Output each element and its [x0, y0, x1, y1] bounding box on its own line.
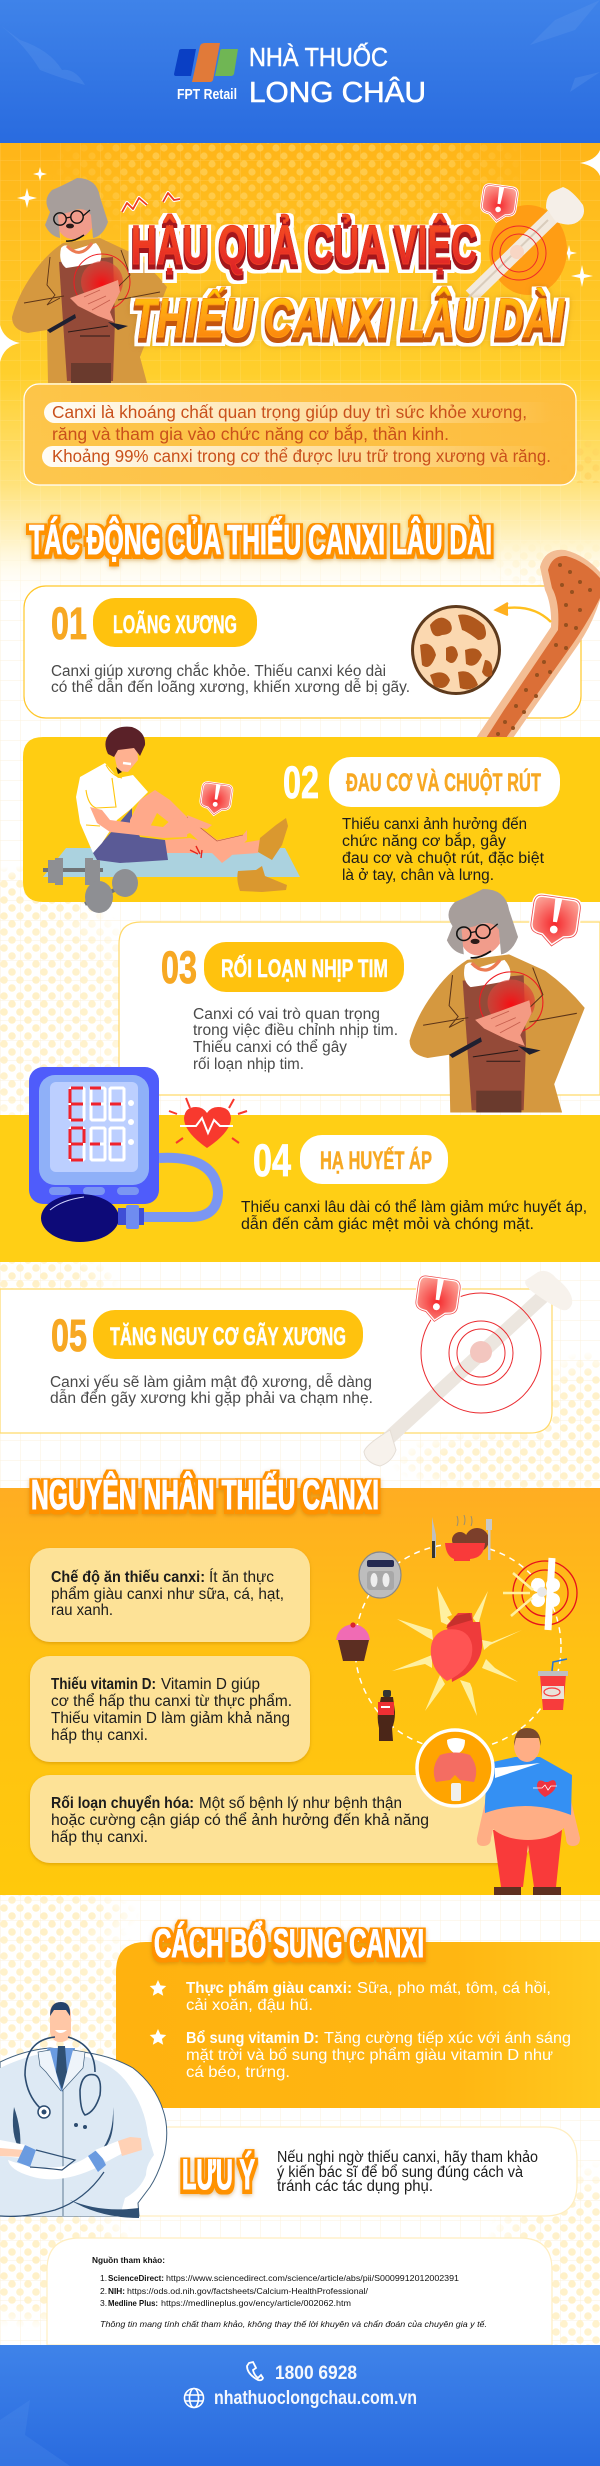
panel: references: https://ods.od.nih.gov/factsheets/Calcium-HealthProfessional/ [127, 2286, 369, 2296]
number 04: 04 [253, 1135, 291, 1186]
icon: cupcake [336, 1622, 370, 1661]
cause: diet: Chế độ ăn thiếu canxi: [51, 1569, 205, 1586]
body text: Thiếu canxi ảnh hưởng đến [342, 816, 527, 833]
body text: Thiếu canxi lâu dài có thể làm giảm mức huyết áp, [241, 1199, 587, 1216]
head [113, 745, 138, 772]
icon: joint pain [503, 1558, 577, 1630]
panel: references: https://www.sciencedirect.com/science/article/abs/pii/S0009912012002391 [166, 2273, 459, 2283]
label: Lưu ý: LƯU Ý [182, 2151, 255, 2199]
logo: FPT Retail [174, 43, 238, 103]
icon: thyroid [417, 1730, 493, 1806]
illustration: doctor [0, 2002, 167, 2218]
icon: heart with pulse [169, 1098, 247, 1148]
panel: references: Thông tin mang tính chất tham khảo, không thay thế lời khuyên và chẩn đoán của chuyên gia y tế. [100, 2319, 487, 2329]
badge: Loãng xương [93, 598, 257, 647]
cause: metabolic: Một số bệnh lý như bệnh thận [199, 1795, 402, 1812]
illustration: obese man [477, 1728, 580, 1895]
crossed arms [8, 2153, 100, 2179]
cause: vitamin D: hấp thụ canxi. [51, 1727, 148, 1744]
brand name [249, 42, 426, 109]
panel: note [120, 2127, 577, 2216]
panel: how to supplement [116, 1942, 600, 2108]
icon: cola bottle [378, 1690, 395, 1741]
panel: references: 3. [100, 2298, 107, 2308]
body text: Canxi yếu sẽ làm giảm mật độ xương, dễ dàng [50, 1374, 372, 1391]
diagram: causes around the heart [336, 1515, 580, 1895]
pain marks [190, 846, 202, 858]
logo: FPT Retail: FPT Retail [177, 87, 237, 103]
body text [51, 663, 410, 696]
star bullet [150, 2029, 166, 2045]
item: food: Thực phẩm giàu canxi: [186, 1979, 352, 1997]
header band with logo [0, 0, 600, 143]
icon: meal [432, 1515, 492, 1561]
cause: metabolic: hấp thụ canxi. [51, 1829, 148, 1846]
torso [76, 763, 148, 853]
item: vitamin D: mặt trời và bổ sung thực phẩm giàu vitamin D như [186, 2046, 553, 2064]
cause: vitamin D [30, 1656, 310, 1762]
panel: 03 heart rhythm [119, 922, 600, 1095]
badge: Đau cơ và chuột rút [329, 757, 560, 807]
footer band [0, 2345, 600, 2466]
illustration: woman with palpitations [410, 889, 585, 1112]
dumbbells [43, 858, 138, 913]
cause: metabolic [30, 1775, 530, 1863]
body text: có thể dẫn đến loãng xương, khiến xương dễ bị gãy. [51, 679, 410, 696]
cause: vitamin D: Thiếu vitamin D: [51, 1676, 156, 1693]
body text: Canxi có vai trò quan trọng [193, 1006, 380, 1023]
body text: dẫn đến cảm giác mệt mỏi và chóng mặt. [241, 1216, 534, 1233]
item: vitamin D: Bổ sung vitamin D: [186, 2029, 319, 2047]
item: vitamin D [186, 2029, 571, 2081]
cause: vitamin D: cơ thể hấp thu canxi từ thực phẩm. [51, 1693, 292, 1710]
panel: references: 1. [100, 2273, 107, 2283]
back leg [165, 838, 260, 855]
illustration: fractured bone with rings [364, 1271, 572, 1466]
raised leg [130, 790, 247, 863]
brand name: NHÀ THUỐC [249, 42, 388, 72]
body text: rối loạn nhịp tim. [193, 1056, 304, 1073]
illustration: elderly woman holding chest [12, 178, 167, 383]
arrow [496, 603, 551, 622]
intro callout: Canxi là khoáng chất quan trọng giúp duy trì sức khỏe xương, [52, 402, 527, 422]
cause: diet: rau xanh. [51, 1602, 113, 1619]
cause: diet [30, 1548, 310, 1642]
note text: Nếu nghi ngờ thiếu canxi, hãy tham khảo [277, 2149, 538, 2166]
body text [241, 1199, 587, 1233]
body text: trong việc điều chỉnh nhịp tim. [193, 1022, 398, 1039]
icon: scale [359, 1552, 401, 1598]
shorts [93, 808, 168, 863]
icon: soda cup [538, 1659, 568, 1710]
cause: metabolic: hoặc cường cận giáp có thể ảnh hưởng đến khả năng [51, 1812, 429, 1829]
icon: alert [413, 1275, 461, 1324]
item: food: Sữa, pho mát, tôm, cá hồi, [357, 1980, 551, 1997]
intro callout: răng và tham gia vào chức năng cơ bắp, thần kinh. [52, 423, 449, 444]
body text: là ở tay, chân và lưng. [342, 867, 494, 884]
number 01: 01 [51, 598, 87, 649]
icon: alert [528, 894, 582, 949]
shoe on mat [237, 866, 287, 892]
brand name: LONG CHÂU [249, 76, 426, 109]
number 02: 02 [283, 757, 319, 808]
panel: references: https://medlineplus.gov/ency/article/002062.htm [161, 2298, 351, 2308]
panel: references: ScienceDirect: [108, 2273, 164, 2283]
body text [342, 816, 545, 884]
panel: references: Nguồn tham khảo: [92, 2255, 165, 2265]
panel: 02 muscle cramps [23, 737, 600, 902]
badge: Tăng nguy cơ gãy xương [93, 1310, 363, 1359]
title [131, 213, 565, 349]
badge: Tăng nguy cơ gãy xương: TĂNG NGUY CƠ GÃY XƯƠNG [110, 1321, 346, 1351]
website: nhathuoclongchau.com.vn [214, 2388, 417, 2409]
badge: Rối loạn nhịp tim [204, 942, 404, 992]
body text [50, 1374, 373, 1407]
number 03: 03 [161, 942, 197, 993]
hero panel [0, 143, 600, 603]
cause: diet: Ít ăn thực [209, 1569, 274, 1586]
panel: references [47, 2238, 552, 2345]
item: vitamin D: cá béo, trứng. [186, 2064, 290, 2081]
body text: chức năng cơ bắp, gây [342, 833, 506, 850]
note text: tránh các tác dụng phụ. [277, 2178, 433, 2195]
page background [0, 548, 600, 2345]
illustration: fractured bone with alert [466, 184, 584, 300]
star bullet [150, 1980, 166, 1996]
badge: Hạ huyết áp: HẠ HUYẾT ÁP [320, 1146, 432, 1175]
body text [193, 1006, 398, 1073]
panel: 01 osteoporosis [24, 586, 581, 718]
icon: bone cross-section [411, 605, 501, 695]
phone number: 1800 6928 [275, 2363, 357, 2384]
panel: 04 low blood pressure [0, 1115, 600, 1262]
illustration: man with leg cramp [43, 727, 300, 913]
icon: alert [480, 184, 518, 224]
icon: heart with rays [392, 1586, 522, 1716]
note text: ý kiến bác sĩ để bổ sung đúng cách và [277, 2164, 523, 2181]
badge: Hạ huyết áp [300, 1135, 448, 1184]
body text: dẫn đến gãy xương khi gặp phải va chạm nhẹ. [50, 1390, 373, 1407]
number 05: 05 [51, 1310, 87, 1361]
intro callout [24, 384, 576, 485]
body text: Thiếu canxi có thể gây [193, 1039, 347, 1056]
item: food: cải xoăn, đậu hũ. [186, 1997, 313, 2014]
icon: alert [199, 782, 233, 817]
panel: causes [0, 1488, 600, 1895]
item: food [186, 1979, 551, 2014]
badge: Loãng xương: LOÃNG XƯƠNG [113, 609, 237, 639]
illustration: blood pressure monitor [29, 1067, 247, 1242]
panel: 05 fracture risk [0, 1289, 552, 1433]
icon: phone [247, 2362, 263, 2380]
body text: đau cơ và chuột rút, đặc biệt [342, 850, 545, 867]
heading: how to supplement: CÁCH BỔ SUNG CANXI [154, 1919, 424, 1966]
panel: references: 2. [100, 2286, 107, 2296]
panel: references: Medline Plus: [108, 2298, 158, 2308]
icon: pain zigzags [122, 193, 180, 212]
panel: references: NIH: [108, 2286, 125, 2296]
cause: vitamin D: Thiếu vitamin D làm giảm khả năng [51, 1710, 290, 1727]
cause: metabolic: Rối loạn chuyển hóa: [51, 1795, 194, 1812]
intro callout: Khoảng 99% canxi trong cơ thể được lưu trữ trong xương và răng. [52, 446, 551, 466]
item: vitamin D: Tăng cường tiếp xúc với ánh sáng [324, 2030, 571, 2047]
body text: Canxi giúp xương chắc khỏe. Thiếu canxi kéo dài [51, 663, 386, 680]
cause: vitamin D: Vitamin D giúp [161, 1676, 260, 1693]
arm and hands [90, 807, 212, 838]
illustration: porous bone [411, 550, 600, 738]
note text [277, 2149, 538, 2195]
shoe on foot [258, 818, 288, 860]
cause: diet: phẩm giàu canxi như sữa, cá, hạt, [51, 1586, 284, 1603]
badge: Rối loạn nhịp tim: RỐI LOẠN NHỊP TIM [221, 953, 388, 983]
icon: globe [184, 2388, 204, 2408]
